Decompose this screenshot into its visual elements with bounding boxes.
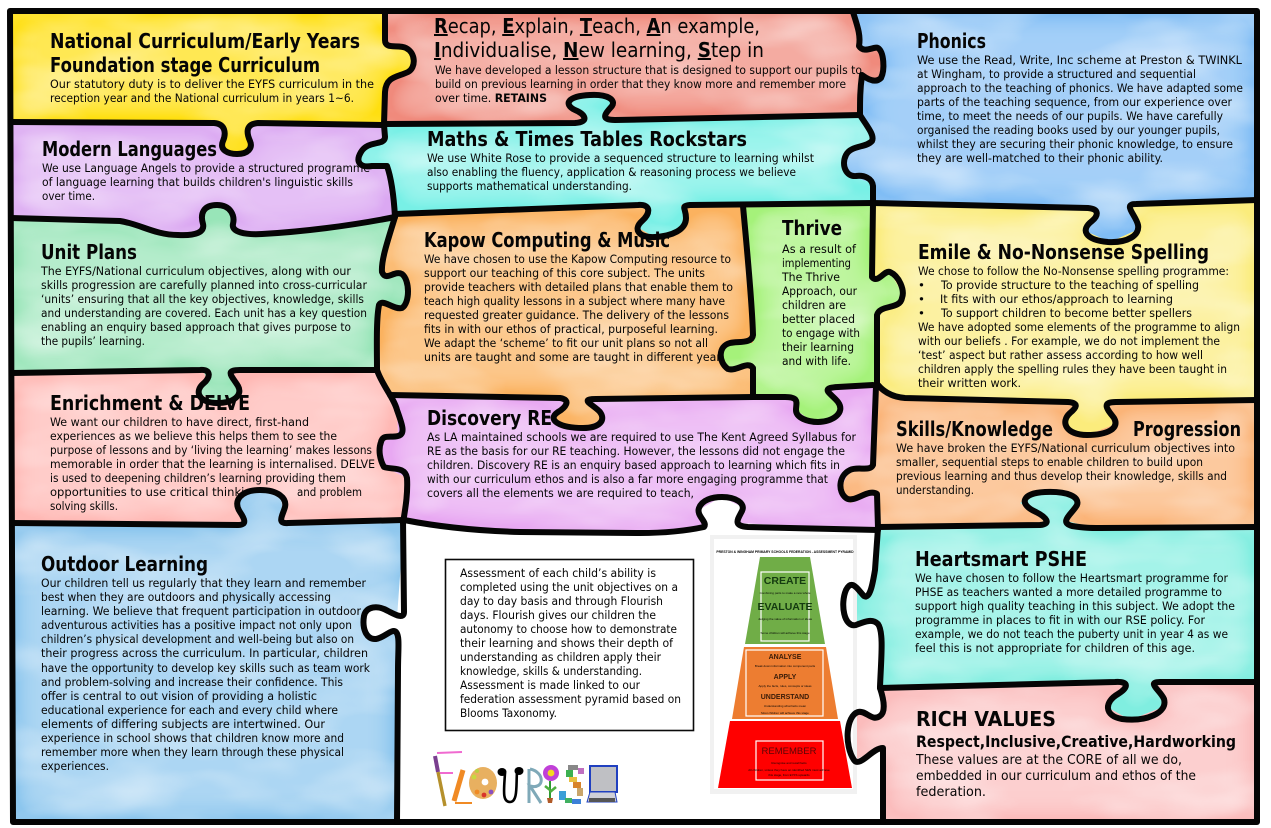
body text: Heartsmart: We have chosen to follow the Heartsmart programme for	[915, 571, 1228, 585]
panel: Outdoor Learning	[9, 490, 404, 822]
body text: Discovery RE: children. Discovery RE is an enquiry based approach to learning which fits in	[427, 458, 840, 472]
body text: Maths: We use White Rose to provide a sequenced structure to learning whilst	[427, 151, 814, 165]
heading: Unit Plans: Unit Plans	[41, 240, 137, 264]
body text: Thrive: As a result of	[782, 242, 857, 256]
pyramid tier: analyse, apply and understand: Apply the facts, rules, concepts or ideas	[758, 684, 812, 688]
body text: Thrive: to engage with	[782, 326, 860, 340]
pyramid tier: analyse, apply and understand: APPLY	[774, 674, 797, 681]
pyramid tier: create and evaluate: CREATE	[764, 575, 806, 587]
body text: Skills: previous learning and thus develop their knowledge, skills and	[896, 469, 1227, 483]
body text: Heartsmart: example, we do not teach the puberty unit in year 4 as we	[915, 627, 1228, 641]
assessment text box: day to day basis and through Flourish	[460, 594, 663, 608]
body text: Modern Languages	[42, 161, 370, 203]
panel: Maths and Times Tables Rockstars	[358, 94, 873, 237]
heading: Modern Languages: Modern Languages	[42, 137, 217, 161]
heading: RETAINS	[434, 14, 764, 62]
body text: Outdoor Learning: best when they are outdoors and physically accessing	[41, 590, 331, 604]
panel: Kapow Computing and Music	[377, 205, 753, 428]
body text: Kapow: fits in with our ethos of practical, purposeful learning.	[424, 322, 718, 336]
body text: Unit Plans: enabling an enquiry based approach that gives purpose to	[41, 320, 351, 334]
body text: Outdoor Learning: learning. We believe that frequent participation in outdoor	[41, 604, 361, 618]
heading: Emile: Emile & No-Nonsense Spelling	[918, 240, 1209, 264]
body text: RICH VALUES: These values are at the CORE of all we do,	[915, 753, 1182, 768]
panel: Modern Languages	[10, 122, 395, 235]
heading: RETAINS: Recap, Explain, Teach, An example,	[434, 14, 760, 38]
panel: Emile and No-Nonsense Spelling	[872, 200, 1257, 435]
heading: RICH VALUES: RICH VALUES	[916, 707, 1056, 731]
heading: Outdoor Learning: Outdoor Learning	[41, 552, 208, 576]
body text: Thrive: their learning	[782, 340, 854, 354]
panel: assessment (white centre)	[396, 497, 883, 822]
body text: Outdoor Learning	[41, 576, 370, 773]
body text: Kapow: requested greater guidance. The delivery of the lessons	[424, 308, 729, 322]
body text: Phonics: approach to the teaching of phonics. We have adapted some	[917, 81, 1243, 95]
body text: Kapow: teach high quality lessons in a subject where many have	[424, 294, 725, 308]
body text: Discovery RE	[427, 430, 856, 500]
panel: Heartsmart PSHE	[844, 493, 1257, 720]
body text: RETAINS: build on previous learning in order that they know more and remember more	[435, 77, 846, 91]
pyramid tier: create and evaluate	[745, 557, 825, 644]
panel: RICH VALUES	[846, 682, 1257, 822]
body text: Outdoor Learning: remember more when they learn through these physical	[41, 745, 344, 759]
pyramid tier: analyse, apply and understand: Most children will achieve this stage	[761, 711, 809, 715]
pyramid tier: create and evaluate: Judging the value of information or ideas	[758, 617, 813, 621]
panel: National Curriculum	[10, 10, 414, 154]
assessment text box: Blooms Taxonomy.	[460, 706, 557, 720]
body text: Heartsmart	[915, 571, 1235, 655]
body text: Outdoor Learning: Our children tell us regularly that they learn and remember	[41, 576, 366, 590]
body text: Kapow: We adapt the ‘scheme’ to fit our unit plans so not all	[424, 336, 708, 350]
icon: Flourish logo	[435, 752, 617, 806]
body text: Heartsmart: support high quality teaching in this subject. We adopt the	[915, 599, 1235, 613]
body text: Kapow: We have chosen to use the Kapow Computing resource to	[424, 252, 731, 266]
panel: Phonics	[843, 10, 1257, 242]
body text: Emile: To provide structure to the teaching of spelling	[940, 278, 1199, 292]
body text: Phonics: parts of the teaching sequence, from our experience over	[917, 95, 1232, 109]
panel: Unit Plans	[10, 205, 408, 403]
body text: Enrichment: purpose of lessons and by ‘living the learning’ makes lessons	[50, 443, 372, 457]
body text: Phonics: We use the Read, Write, Inc scheme at Preston & TWINKL	[917, 53, 1242, 67]
heading: Enrichment: Enrichment & DELVE	[50, 391, 250, 415]
assessment text box: Assessment of each child’s ability is	[460, 566, 656, 580]
body text: Unit Plans: the pupils’ learning.	[41, 334, 145, 348]
body text: Thrive: better placed	[782, 312, 855, 326]
body text: Outdoor Learning: experiences.	[41, 759, 109, 773]
body text: RICH VALUES	[915, 753, 1196, 800]
pyramid tier: remember: All children, unless they have an identified SEN must achieve	[748, 768, 830, 772]
heading: Thrive: Thrive	[782, 216, 842, 240]
pyramid tier: analyse, apply and understand: Break down information into component parts	[755, 664, 816, 668]
heading: Discovery RE: Discovery RE	[427, 406, 552, 430]
body text: National Curriculum: Our statutory duty is to deliver the EYFS curriculum in the	[50, 77, 374, 91]
body text: Emile: To support children to become better spellers	[940, 306, 1192, 320]
body text: Unit Plans: ‘units’ ensuring that all the key objectives, knowledge, skills	[41, 292, 364, 306]
body text: Thrive: The Thrive	[781, 270, 840, 284]
body text: Emile: We chose to follow the No-Nonsense spelling programme:	[918, 264, 1229, 278]
heading: Kapow: Kapow Computing & Music	[424, 228, 670, 252]
pyramid tier: remember: Recognise and recall facts	[771, 761, 807, 765]
chart: assessment pyramid	[710, 535, 857, 794]
body text: Unit Plans	[40, 264, 367, 348]
body text: RETAINS	[435, 63, 862, 105]
body text: Phonics: time, to meet the needs of our pupils. We have carefully	[917, 109, 1223, 123]
body text: Thrive: children are	[782, 298, 846, 312]
heading: Maths: Maths & Times Tables Rockstars	[427, 127, 747, 151]
body text: Kapow	[424, 252, 733, 364]
body text: Emile: •	[918, 278, 925, 292]
body text: Thrive: and with life.	[782, 354, 851, 368]
assessment text box: completed using the unit objectives on a	[460, 580, 678, 594]
panel: Recap / RETAINS	[384, 10, 883, 124]
assessment text box: their learning and shows their depth of	[460, 636, 674, 650]
panel: Skills/Knowledge Progression	[840, 385, 1257, 528]
body text: Kapow: units are taught and some are taught in different years.	[424, 350, 730, 364]
heading: RETAINS: Individualise, New learning, Step in	[434, 38, 764, 62]
body text: Enrichment: memorable in order that the learning is internalised. DELVE	[50, 457, 375, 471]
heading: Phonics: Phonics	[917, 29, 986, 53]
body text: Heartsmart: feel this is not appropriate for children of this age.	[915, 641, 1195, 655]
body text: Emile: with our beliefs . For example, we do not implement the	[918, 334, 1220, 348]
body text: Skills: We have broken the EYFS/National curriculum objectives into	[896, 441, 1235, 455]
pyramid tier: analyse, apply and understand: ANALYSE	[769, 654, 802, 661]
body text: Unit Plans: skills progression are carefully planned into cross-curricular	[41, 278, 367, 292]
assessment text box: Assessment is made linked to our	[460, 678, 640, 692]
pyramid tier: create and evaluate: Combining parts to make a new whole	[760, 591, 811, 595]
body text: Outdoor Learning: experience in school shows that children know more and	[41, 731, 344, 745]
body text: Outdoor Learning: elements of differing subjects are intertwined. Our	[41, 717, 325, 731]
body text: Enrichment	[50, 415, 375, 513]
body text: Skills: understanding.	[896, 483, 974, 497]
pyramid tier: create and evaluate: Some children will achieve this stage	[760, 631, 810, 635]
assessment text box: autonomy to choose how to demonstrate	[460, 622, 677, 636]
panel: Discovery RE	[380, 386, 878, 533]
body text: Emile: ‘test’ aspect but rather assess according to how well	[918, 348, 1203, 362]
body text: Phonics: they are well-matched to their phonic ability.	[917, 151, 1163, 165]
body text: National Curriculum: reception year and the National curriculum in years 1~6.	[50, 91, 354, 105]
pyramid tier: create and evaluate: EVALUATE	[757, 601, 813, 613]
assessment text box: federation assessment pyramid based on	[460, 692, 681, 706]
panel: Enrichment and DELVE	[9, 370, 407, 525]
body text: Outdoor Learning: educational experience for each and every child where	[41, 703, 338, 717]
body text: Kapow: support our teaching of this core subject. The units	[424, 266, 705, 280]
heading: National Curriculum	[50, 29, 360, 77]
body text: Outdoor Learning: their progress across the curriculum. In particular, children	[41, 646, 368, 660]
heading: Heartsmart PSHE: Heartsmart PSHE	[915, 547, 1087, 571]
chart: assessment pyramid: PRESTON & WINGHAM PRIMARY SCHOOLS FEDERATION - ASSESSMENT PYRAMID	[716, 550, 854, 554]
body text: National Curriculum	[50, 77, 374, 105]
body text: RICH VALUES: embedded in our curriculum and ethos of the	[916, 769, 1196, 784]
body text: Maths	[427, 151, 814, 193]
body text: Discovery RE: with our curriculum ethos and is also a far more engaging programme that	[427, 472, 828, 486]
body text: Emile	[918, 264, 1240, 390]
body text: Phonics: at Wingham, to provide a structured and sequential	[917, 67, 1196, 81]
pyramid tier: analyse, apply and understand	[732, 647, 838, 719]
body text: Outdoor Learning: have the opportunity to develop key skills such as team work	[41, 661, 370, 675]
body text: Heartsmart: PHSE as teachers wanted a more detailed programme to	[915, 585, 1222, 599]
heading: Skills/Knowledge Progression	[896, 417, 1241, 441]
assessment text box: knowledge, skills & understanding.	[460, 664, 642, 678]
body text: Outdoor Learning: and problem-solving and increase their confidence. This	[41, 675, 343, 689]
heading: Skills/Knowledge Progression: Progression	[1133, 417, 1241, 441]
body text: Phonics: organised the reading books used by our younger pupils,	[917, 123, 1220, 137]
body text: Modern Languages: of language learning that builds children's linguistic skills	[42, 175, 353, 189]
body text: Enrichment: opportunities to use critical thinking	[50, 485, 259, 499]
body text: Maths: also enabling the fluency, application & reasoning process we believe	[427, 165, 796, 179]
pyramid tier: analyse, apply and understand: UNDERSTAND	[761, 694, 809, 701]
body text: Modern Languages: We use Language Angels to provide a structured programme	[42, 161, 370, 175]
heading: Skills/Knowledge Progression: Skills/Knowledge	[896, 417, 1053, 441]
body text: Outdoor Learning: children’s physical development and well-being but also on	[41, 632, 354, 646]
pyramid tier: remember: this stage, from EYFS upwards	[768, 773, 810, 777]
body text: Emile: •	[918, 306, 925, 320]
body text: Discovery RE: covers all the elements we are required to teach,	[427, 486, 694, 500]
body text: Thrive	[781, 242, 860, 368]
body text: Modern Languages: over time.	[42, 189, 95, 203]
body text: Emile: children apply the spelling rules they have been taught in	[918, 362, 1227, 376]
panel: Thrive	[720, 203, 902, 422]
body text: Enrichment: and problem	[297, 485, 362, 499]
body text: Maths: supports mathematical understanding.	[427, 179, 632, 193]
body text: Phonics	[917, 53, 1243, 165]
body text: Outdoor Learning: adventurous activities has a positive impact not only upon	[41, 618, 352, 632]
body text: RICH VALUES: federation.	[916, 785, 986, 800]
body text: Thrive: implementing	[782, 256, 851, 270]
assessment text box: days. Flourish gives our children the	[460, 608, 656, 622]
pyramid tier: remember: REMEMBER	[762, 746, 817, 757]
body text: Enrichment: experiences as we believe this helps them to see the	[50, 429, 337, 443]
body text: RETAINS: We have developed a lesson structure that is designed to support our pupils to	[435, 63, 862, 77]
body text: Enrichment: solving skills.	[50, 499, 118, 513]
body text: Skills: smaller, sequential steps to enable children to build upon	[896, 455, 1203, 469]
body text: Thrive: Approach, our	[782, 284, 857, 298]
heading: National Curriculum: National Curriculum/Early Years	[50, 29, 360, 53]
pyramid tier: remember	[718, 721, 852, 788]
body text: Discovery RE: RE as the basis for our RE teaching. However, the lessons did not engage the	[427, 444, 845, 458]
body text: Emile: We have adopted some elements of the programme to align	[918, 320, 1240, 334]
body text: Discovery RE: As LA maintained schools we are required to use The Kent Agreed Syllabus for	[427, 430, 856, 444]
assessment text box: understanding as children apply their	[460, 650, 661, 664]
body text: RETAINS: over time. RETAINS	[435, 91, 547, 105]
body text: Emile: It fits with our ethos/approach to learning	[940, 292, 1173, 306]
body text: Unit Plans: The EYFS/National curriculum objectives, along with our	[40, 264, 351, 278]
body text: Phonics: whilst they are securing their phonic knowledge, to ensure	[917, 137, 1233, 151]
body text: Enrichment: is used to deepening children’s learning providing them	[50, 471, 346, 485]
body text: Kapow: provide teachers with detailed plans that enable them to	[424, 280, 733, 294]
body text: Enrichment: We want our children to have direct, first-hand	[50, 415, 309, 429]
body text: Emile: their written work.	[918, 376, 1021, 390]
assessment text box	[446, 560, 694, 730]
body text: Heartsmart: programme in places to fit in with our RSE policy. For	[915, 613, 1205, 627]
pyramid tier: analyse, apply and understand: Understanding what facts mean	[764, 704, 806, 708]
body text: Outdoor Learning: offer is central to out vision of providing a holistic	[41, 689, 317, 703]
subheading: values: Respect,Inclusive,Creative,Hardworking	[916, 732, 1236, 751]
heading: National Curriculum: Foundation stage Curriculum	[50, 53, 320, 77]
body text: Unit Plans: and understanding are covered. Each unit has a key question	[41, 306, 367, 320]
body text: Skills	[896, 441, 1235, 497]
body text: Emile: •	[918, 292, 925, 306]
